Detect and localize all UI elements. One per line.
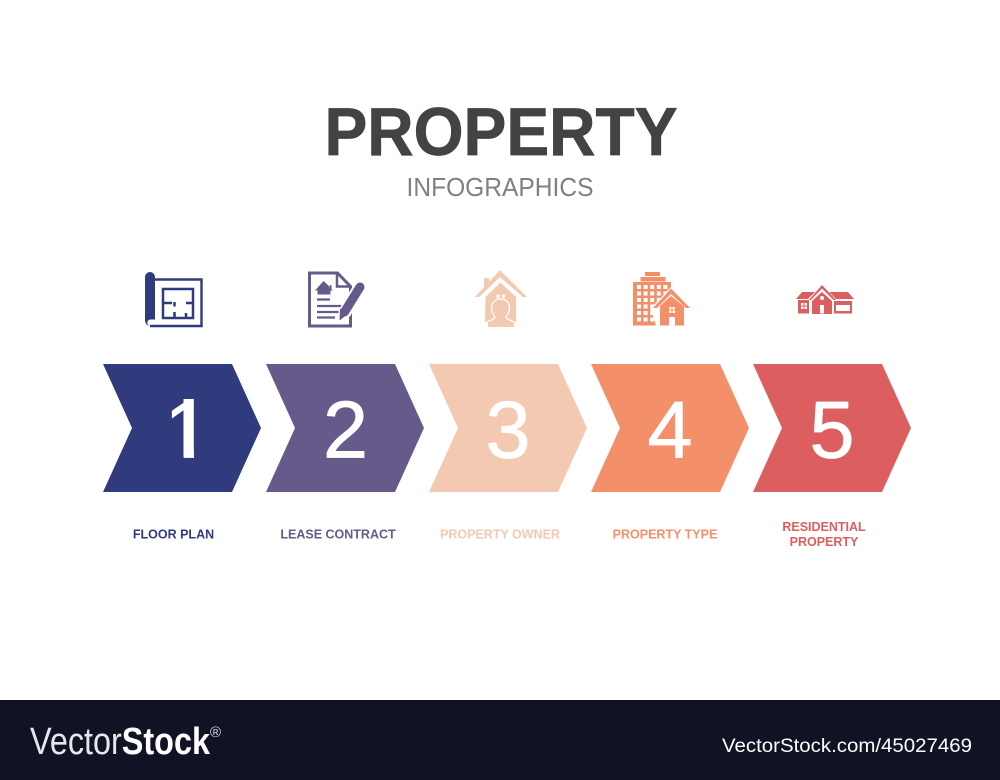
label: property owner: PROPERTY OWNER	[440, 528, 560, 542]
number 1: 1	[164, 386, 210, 476]
footer registered mark: ®	[210, 724, 221, 741]
label: floor plan: FLOOR PLAN	[133, 528, 214, 542]
footer bar	[0, 700, 1000, 780]
subtitle: INFOGRAPHICS	[406, 172, 594, 202]
title: PROPERTY	[324, 94, 678, 170]
icon: lease contract	[310, 272, 360, 326]
footer logo: VectorStock	[30, 721, 211, 763]
label: residential property: PROPERTY	[790, 535, 859, 549]
number 2: 2	[323, 386, 368, 476]
arrow 5	[753, 364, 911, 492]
icon: residential property	[796, 285, 854, 314]
label: lease contract: LEASE CONTRACT	[280, 528, 396, 542]
icon: property type	[633, 272, 692, 326]
footer image id: VectorStock.com/45027469	[722, 736, 972, 757]
arrow 4	[591, 364, 749, 492]
label: property type: PROPERTY TYPE	[613, 528, 717, 542]
arrow 2	[266, 364, 424, 492]
icon: floor plan	[145, 272, 202, 326]
number 4: 4	[647, 386, 693, 476]
number 5: 5	[809, 386, 855, 476]
icon: property owner	[475, 270, 527, 327]
label: residential property: RESIDENTIAL	[782, 520, 866, 534]
arrow 1	[103, 364, 261, 492]
number 3: 3	[485, 386, 531, 476]
arrow 3	[429, 364, 587, 492]
